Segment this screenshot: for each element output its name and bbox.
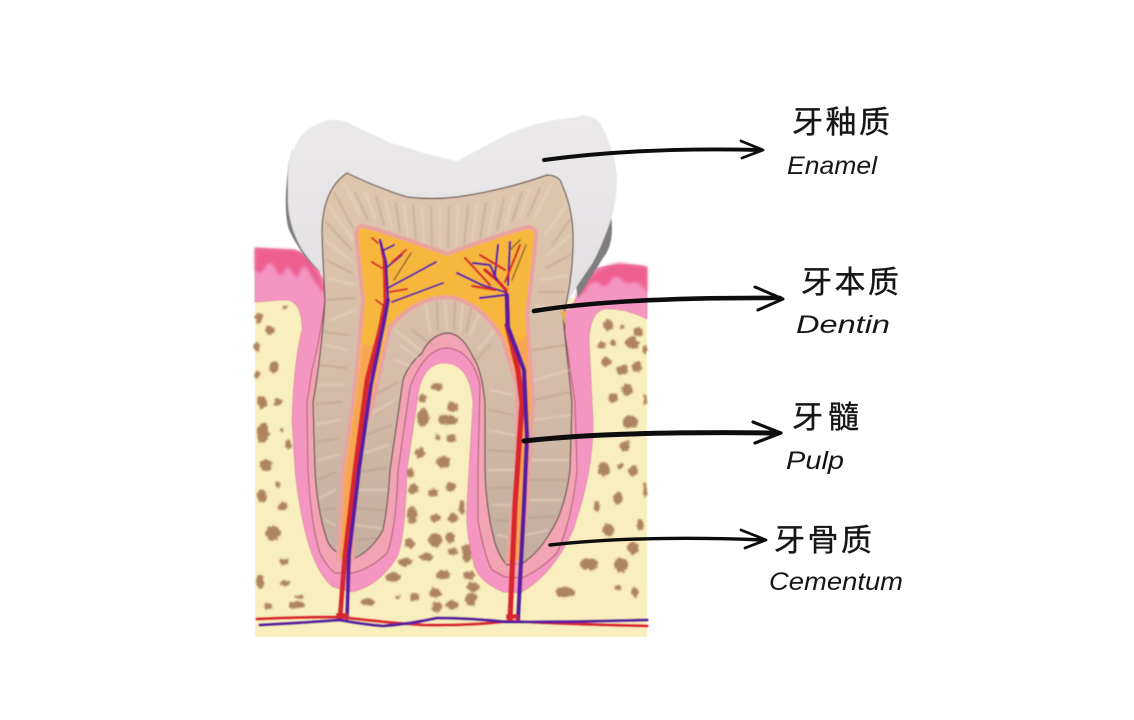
arrow: cementum: [550, 530, 766, 548]
label: cementum: 牙骨质: [774, 523, 872, 558]
label: cementum: [769, 523, 903, 596]
arrow: pulp: [524, 422, 781, 443]
label: cementum: Cementum: [769, 568, 903, 596]
dark enamel edge: [286, 160, 612, 298]
label: pulp: 牙髓: [792, 400, 859, 435]
pulp chamber: [338, 226, 536, 562]
blood vessels: right: [457, 240, 527, 620]
label: dentin: Dentin: [796, 311, 890, 339]
blood vessels: left: [340, 238, 443, 618]
dentin tubule texture: [316, 185, 570, 540]
label: dentin: 牙本质: [801, 265, 899, 300]
label: enamel: 牙釉质: [792, 105, 890, 140]
enamel highlight: [293, 116, 580, 160]
label: enamel: Enamel: [787, 152, 879, 180]
cementum layer: [307, 300, 577, 578]
label: enamel: [787, 105, 890, 180]
blood vessels: base: [257, 617, 647, 626]
enamel: [288, 115, 617, 312]
bone block: [255, 298, 647, 637]
dentin: [313, 173, 573, 565]
label: pulp: Pulp: [786, 447, 844, 475]
label: pulp: [786, 400, 859, 475]
arrow: enamel: [544, 141, 763, 160]
arrow: dentin: [534, 287, 783, 311]
gum top left: [255, 248, 326, 296]
gums and periodontal ligament: [255, 248, 647, 593]
enamel-gum seam: [560, 311, 566, 325]
root junction: [336, 613, 518, 619]
root canals: [340, 335, 531, 560]
gum top right: [575, 263, 647, 298]
tooth diagram: [254, 115, 647, 637]
label: dentin: [796, 265, 899, 339]
bone spots: [254, 305, 647, 612]
